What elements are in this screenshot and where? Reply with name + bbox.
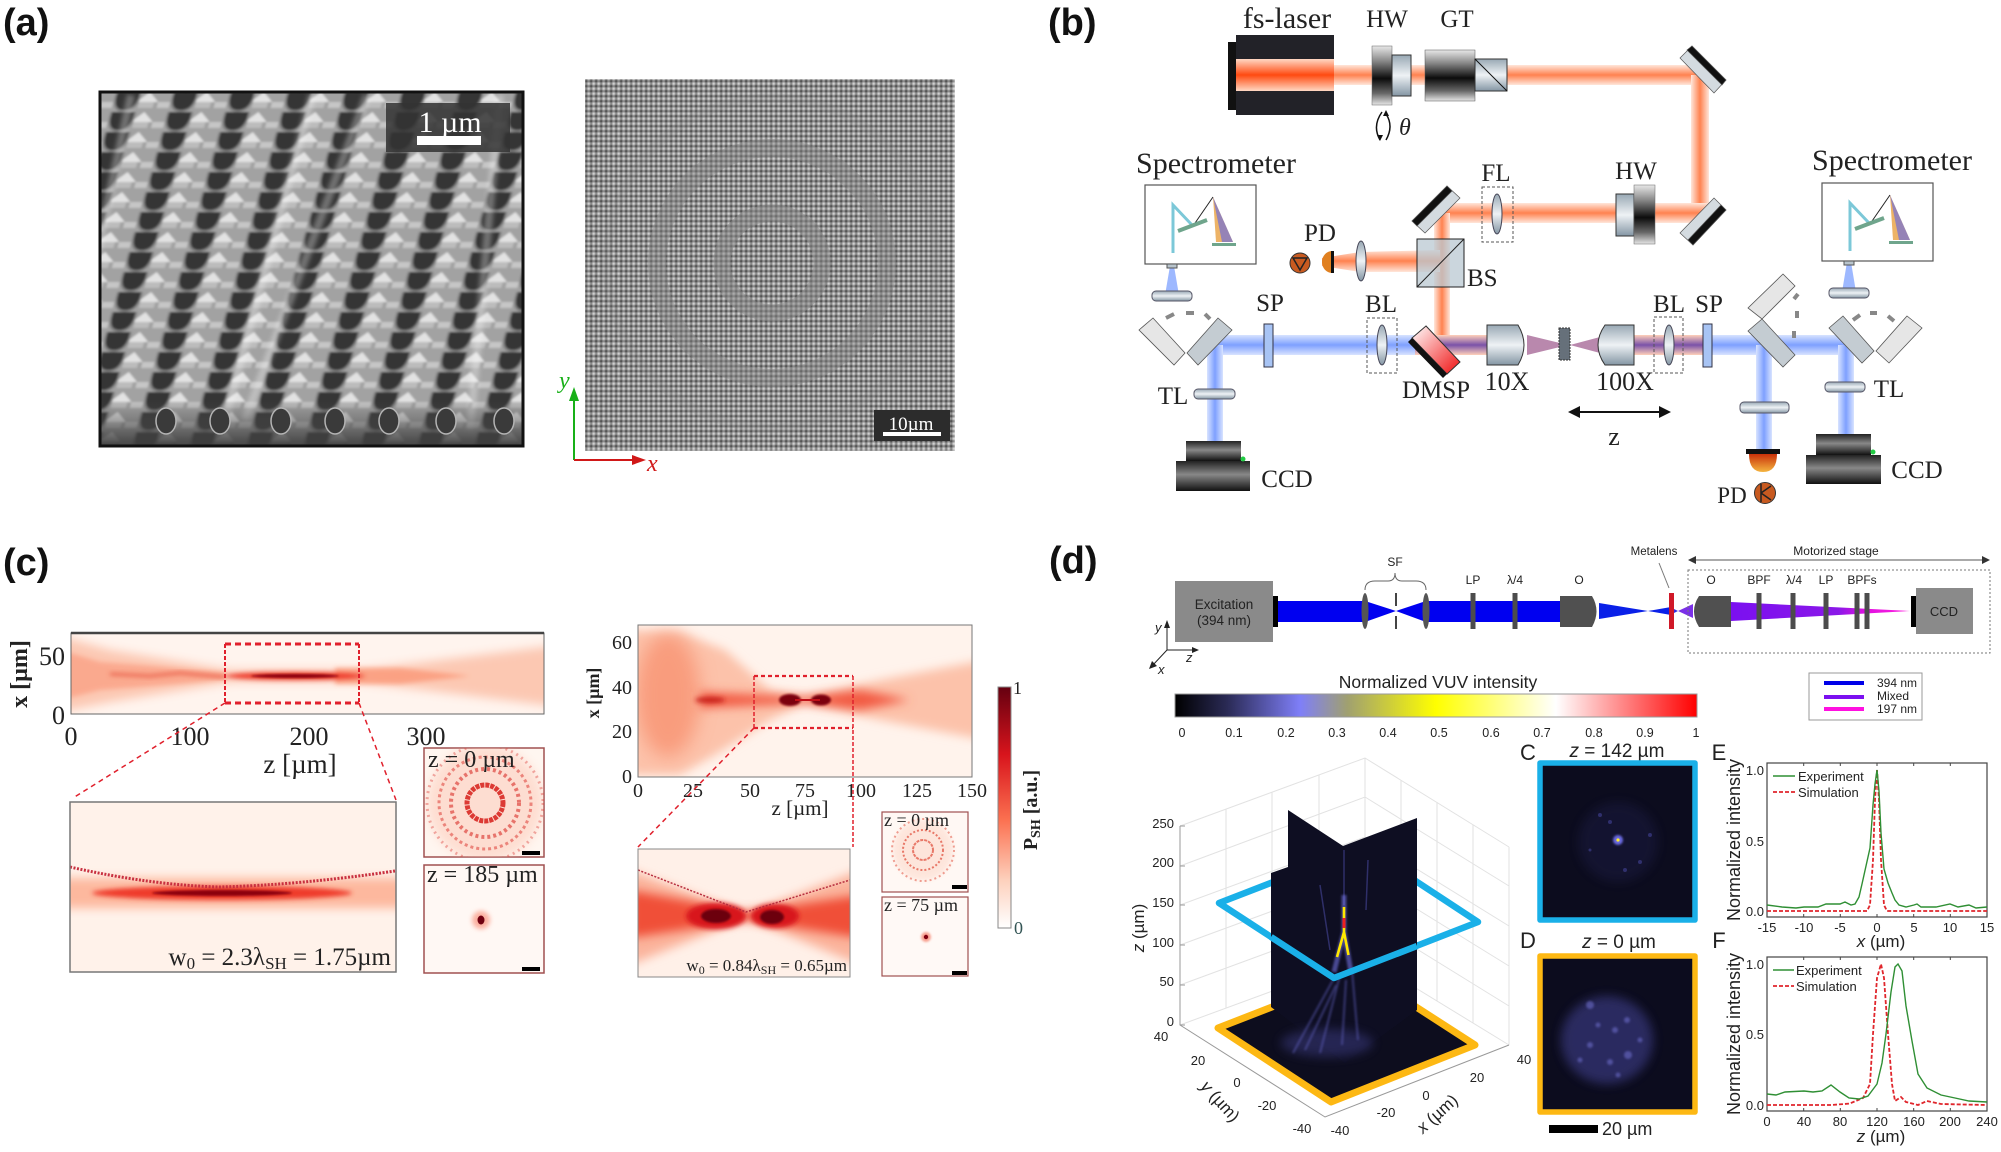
VUV colorbar: Normalized VUV intensity — [1339, 672, 1537, 692]
image D at z=0 — [1520, 928, 1695, 1112]
panel b label: (b) — [1048, 2, 1097, 44]
scale bar 20 µm: 20 µm — [1602, 1119, 1652, 1139]
scale bar 20 µm — [1549, 1119, 1652, 1139]
VUV colorbar: 0.4 — [1379, 726, 1397, 740]
3D plot tick labels: 20 — [1470, 1070, 1484, 1085]
chart F: axial intensity profile — [1712, 928, 1998, 1146]
VUV colorbar: 0.3 — [1328, 726, 1346, 740]
photodiode right: PD — [1717, 483, 1747, 508]
VUV colorbar: 0.2 — [1277, 726, 1295, 740]
panel: a, nanostructure micrographs — [90, 79, 955, 477]
3D plot tick labels: 0 — [1422, 1088, 1430, 1103]
spatial filter SF — [1362, 555, 1430, 629]
scale bar 1 µm: 1 µm — [418, 106, 482, 139]
dichroic mirror DMSP: DMSP — [1402, 377, 1470, 404]
chart E: lateral intensity profile: 0.5 — [1746, 834, 1764, 849]
metalens marker — [1631, 546, 1678, 629]
base plane gold frame — [1218, 972, 1475, 1102]
intensity colorbar: 1 — [1013, 678, 1022, 698]
zoomed heatmap tight focus: SH — [761, 963, 776, 977]
heatmap 1 axes: z [µm] — [263, 749, 337, 779]
heatmap 1 axes: x [µm] — [7, 640, 33, 708]
tube lens labels — [1158, 376, 1904, 410]
3D plot tick labels: 20 — [1191, 1053, 1205, 1068]
panel: b, optical setup schematic — [1136, 2, 1972, 508]
flip mirrors right — [1748, 274, 1922, 367]
3D plot tick labels: -20 — [1377, 1105, 1395, 1120]
3D plot tick labels: 0 — [1167, 1014, 1174, 1029]
optics row labels and filters: λ/4 — [1786, 573, 1802, 587]
image D at z=0: z = 0 µm — [1581, 932, 1656, 953]
VUV colorbar: 0.9 — [1636, 726, 1654, 740]
heatmap 2 axes — [583, 632, 987, 820]
3D plot tick labels: -40 — [1293, 1121, 1311, 1136]
blocking lenses BL — [1365, 291, 1685, 373]
image C at z=142 — [1520, 740, 1695, 920]
CCD camera — [1911, 588, 1973, 634]
3D plot tick labels: 40 — [1517, 1052, 1531, 1067]
spectrometer left — [1136, 147, 1296, 268]
panel: d, VUV metalens experiment — [1129, 544, 1998, 1146]
inset z=0 long focus — [424, 745, 544, 861]
chart E: lateral intensity profile: 15 — [1980, 920, 1994, 935]
3D plot tick labels: z (µm) — [1129, 904, 1148, 953]
VUV colorbar: 0.8 — [1585, 726, 1603, 740]
CCD camera: CCD — [1930, 604, 1958, 619]
excitation source — [1175, 581, 1278, 642]
3D plot tick labels: -40 — [1331, 1123, 1349, 1138]
image C at z=142: C — [1520, 740, 1536, 765]
3D plot tick labels: x (µm) — [1412, 1091, 1462, 1138]
metalens sample — [1559, 328, 1570, 360]
photodiode reference arm: PD — [1304, 220, 1336, 247]
chart E: lateral intensity profile — [1712, 740, 1994, 951]
zoomed heatmap tight focus — [630, 849, 860, 977]
chart E: lateral intensity profile: x (µm) — [1856, 932, 1905, 951]
wavelength legend: 394 nm — [1877, 676, 1917, 690]
zoom box with connector lines, tight focus — [638, 676, 853, 847]
excitation source: (394 nm) — [1197, 613, 1251, 628]
focusing lens FL — [1481, 160, 1513, 242]
heatmap 1 axes: 50 — [39, 642, 65, 671]
VUV colorbar: 0.5 — [1430, 726, 1448, 740]
chart F: axial intensity profile: 0.5 — [1746, 1027, 1764, 1042]
collection lenses — [1152, 288, 1869, 413]
rotation marker theta — [1376, 110, 1411, 141]
photodiode right — [1717, 449, 1780, 508]
blocking lenses BL: BL — [1365, 291, 1397, 318]
chart E: lateral intensity profile: 5 — [1910, 920, 1918, 935]
Glan-Thompson polarizer: GT — [1440, 6, 1474, 33]
panel: c, second-harmonic focusing maps — [7, 625, 1044, 977]
inset z=0 tight focus: z = 0 µm — [884, 810, 949, 830]
half-wave plate 1: HW — [1366, 6, 1408, 33]
chart E: lateral intensity profile: 1.0 — [1746, 763, 1764, 778]
heatmap 2 axes: 20 — [612, 721, 632, 743]
blue beam path — [1164, 262, 1857, 450]
optics row labels and filters: O — [1574, 573, 1584, 587]
3D plot tick labels: 50 — [1160, 974, 1174, 989]
inset z=185 long focus — [424, 862, 544, 973]
3D plot tick labels: 200 — [1152, 855, 1174, 870]
3D plot walls — [1180, 758, 1509, 1045]
heatmap 2 axes: 0 — [633, 780, 643, 802]
wavelength legend: Mixed — [1877, 689, 1909, 703]
3D plot tick labels: 40 — [1154, 1029, 1168, 1044]
xyz axes — [1149, 620, 1199, 677]
optics row labels and filters: BPF — [1747, 573, 1771, 587]
zoomed heatmap long focus: = 1.75µm — [287, 944, 392, 971]
blue focal plane frame back — [1219, 847, 1478, 978]
intensity colorbar — [998, 678, 1044, 938]
heatmap 2 axes: 150 — [957, 780, 987, 802]
zoomed heatmap tight focus: 0 — [699, 963, 705, 977]
inset z=75 tight focus — [882, 895, 968, 976]
optics row labels and filters: LP — [1466, 573, 1480, 587]
heatmap 1 axes: 100 — [170, 722, 210, 751]
objective 10X — [1485, 325, 1530, 396]
panel a label: (a) — [3, 2, 49, 44]
chart F: axial intensity profile: 0 — [1763, 1114, 1771, 1129]
beam splitter BS: BS — [1467, 265, 1498, 292]
chart E: lateral intensity profile: -10 — [1795, 920, 1813, 935]
tube lens labels: TL — [1158, 383, 1188, 410]
heatmap 2 axes: 40 — [612, 677, 632, 699]
optics row labels and filters: BPFs — [1847, 573, 1877, 587]
chart E: lateral intensity profile: Experiment — [1798, 769, 1864, 784]
half-wave plate 2: HW — [1615, 158, 1657, 185]
VUV colorbar: 0.6 — [1482, 726, 1500, 740]
heatmap 2 axes: 50 — [740, 780, 760, 802]
chart E: lateral intensity profile: -5 — [1834, 920, 1846, 935]
optics row labels and filters: LP — [1819, 573, 1833, 587]
heatmap 1 axes: 200 — [290, 722, 328, 751]
3D plot tick labels: 150 — [1152, 895, 1174, 910]
zoomed heatmap long focus: = 2.3λ — [195, 944, 265, 971]
blue focal plane frame front — [1271, 937, 1417, 978]
CCD left: CCD — [1261, 466, 1313, 493]
chart F: axial intensity profile: 240 — [1976, 1114, 1998, 1129]
heatmap 2 axes: 0 — [622, 766, 632, 788]
spectrometer right: Spectrometer — [1812, 144, 1972, 177]
chart E: lateral intensity profile: -15 — [1758, 920, 1776, 935]
heatmap long focus — [60, 633, 560, 714]
heatmap 1 axes — [7, 640, 446, 779]
z translation arrow: z — [1608, 422, 1620, 451]
zoomed heatmap tight focus: = 0.65µm — [776, 956, 847, 975]
CCD left — [1176, 441, 1313, 493]
chart E: lateral intensity profile: 0 — [1873, 920, 1881, 935]
excitation source: Excitation — [1195, 597, 1253, 612]
heatmap 2 axes: 125 — [902, 780, 932, 802]
zoomed heatmap tight focus: = 0.84λ — [705, 956, 762, 975]
optics row labels and filters — [1466, 573, 1877, 629]
objectives — [1560, 596, 1731, 627]
inset z=0 tight focus — [882, 810, 968, 892]
flip mirrors left — [1139, 313, 1232, 365]
Glan-Thompson polarizer — [1425, 6, 1507, 101]
3D plot tick labels — [1129, 816, 1531, 1138]
heatmap 2 axes: z [µm] — [772, 796, 828, 820]
xyz axes: y — [1154, 620, 1163, 635]
chart F: axial intensity profile: 120 — [1866, 1114, 1888, 1129]
image D at z=0: D — [1520, 928, 1536, 953]
image C at z=142: z = 142 µm — [1569, 741, 1664, 762]
VUV colorbar: 0.1 — [1225, 726, 1243, 740]
z translation arrow — [1568, 406, 1671, 451]
half-wave plate 1 — [1366, 6, 1411, 105]
scale bar 1 µm — [386, 103, 510, 152]
orange beam path — [1322, 65, 1709, 345]
chart F: axial intensity profile: 1.0 — [1746, 957, 1764, 972]
panel c label: (c) — [3, 542, 49, 584]
VUV colorbar — [1175, 672, 1700, 740]
heatmap 1 axes: 0 — [64, 722, 78, 751]
zoomed heatmap tight focus: w — [686, 956, 699, 975]
objective 100X — [1596, 325, 1654, 396]
vertical intensity slices — [1271, 810, 1417, 1063]
SEM micrograph — [90, 82, 533, 456]
3D plot tick labels: y (µm) — [1196, 1076, 1243, 1126]
chart E: lateral intensity profile: 10 — [1943, 920, 1957, 935]
laser beam path — [1278, 601, 1910, 622]
focusing lens FL: FL — [1481, 160, 1511, 187]
VUV colorbar: 1 — [1693, 726, 1700, 740]
chart F: axial intensity profile: Experiment — [1796, 963, 1862, 978]
xyz axes: x — [1157, 662, 1165, 677]
motorized stage: Motorized stage — [1793, 544, 1879, 558]
heatmap 2 axes: x [µm] — [583, 668, 603, 718]
photodiode reference arm — [1290, 220, 1366, 281]
intensity colorbar: SH — [1029, 819, 1044, 838]
intensity colorbar: 0 — [1014, 918, 1023, 938]
CCD right — [1806, 434, 1943, 484]
chart F: axial intensity profile: 80 — [1833, 1114, 1847, 1129]
3D plot tick labels: 0 — [1233, 1075, 1241, 1090]
focal beam and wisps — [1281, 850, 1373, 1057]
chart F: axial intensity profile: 160 — [1903, 1114, 1925, 1129]
scale bar 10 µm: 10µm — [889, 414, 934, 435]
metasurface micrograph — [585, 79, 955, 451]
zoomed heatmap long focus: 0 — [187, 954, 195, 973]
inset z=185 long focus: z = 185 µm — [427, 862, 538, 888]
objective 100X: 100X — [1596, 367, 1654, 396]
heatmap 2 axes: 60 — [612, 632, 632, 654]
motorized stage — [1688, 544, 1990, 653]
spectrometer left: Spectrometer — [1136, 147, 1296, 180]
chart F: axial intensity profile: 0.0 — [1746, 1098, 1764, 1113]
spectrometer right — [1812, 144, 1972, 265]
heatmap 2 axes: 100 — [846, 780, 876, 802]
heatmap 1 axes: 300 — [406, 722, 446, 751]
tube lens labels: TL — [1874, 376, 1904, 403]
chart F: axial intensity profile: Normalized intensity — [1724, 953, 1744, 1115]
heatmap 1 axes: 0 — [52, 701, 65, 730]
optics row labels and filters: λ/4 — [1507, 573, 1523, 587]
short pass filters: SP — [1256, 290, 1284, 317]
3D plot tick labels: 250 — [1152, 816, 1174, 831]
short pass filters — [1256, 290, 1723, 367]
chart F: axial intensity profile: z (µm) — [1856, 1127, 1905, 1146]
wavelength legend: 197 nm — [1877, 702, 1917, 716]
zoomed heatmap long focus: w — [169, 944, 187, 971]
wavelength legend — [1809, 673, 1922, 720]
dichroic mirror DMSP — [1402, 326, 1470, 404]
short pass filters: SP — [1695, 291, 1723, 318]
chart E: lateral intensity profile: Normalized intensity — [1724, 759, 1744, 921]
3D focal volume plot — [1129, 758, 1531, 1138]
spatial filter SF: SF — [1387, 555, 1403, 569]
xyz axes: z — [1185, 650, 1193, 665]
optics row labels and filters: O — [1706, 573, 1716, 587]
3D plot tick labels: 100 — [1152, 935, 1174, 950]
half-wave plate 2 — [1615, 158, 1657, 244]
CCD right: CCD — [1891, 457, 1943, 484]
fs-laser: fs-laser — [1243, 2, 1331, 35]
zoom box with connector lines, long focus — [73, 644, 396, 800]
rotation marker theta: θ — [1399, 115, 1411, 141]
mirrors on orange path — [1412, 46, 1726, 245]
VUV colorbar: 0 — [1179, 726, 1186, 740]
chart E: lateral intensity profile: Simulation — [1798, 785, 1859, 800]
chart F: axial intensity profile: F — [1712, 928, 1726, 953]
xy axes: y — [557, 368, 570, 394]
chart F: axial intensity profile: Simulation — [1796, 979, 1857, 994]
zoomed heatmap long focus — [60, 802, 406, 973]
chart F: axial intensity profile: 40 — [1797, 1114, 1811, 1129]
chart E: lateral intensity profile: 0.0 — [1746, 904, 1764, 919]
heatmap 2 axes: 25 — [683, 780, 703, 802]
heatmap 2 axes: 75 — [795, 780, 815, 802]
inset z=0 long focus: z = 0 µm — [428, 747, 515, 773]
panel d label: (d) — [1049, 540, 1098, 582]
intensity colorbar: [a.u.] — [1020, 770, 1042, 819]
chart E: lateral intensity profile: E — [1712, 740, 1726, 765]
xy axes — [557, 368, 658, 477]
fs-laser — [1228, 2, 1334, 115]
heatmap tight focus — [630, 625, 985, 777]
beam splitter BS — [1417, 239, 1498, 292]
3D plot tick labels: -20 — [1258, 1098, 1276, 1113]
scale bar 10 µm — [874, 410, 950, 441]
metalens marker: Metalens — [1631, 546, 1678, 558]
3D plot axes — [1180, 826, 1509, 1117]
objective 10X: 10X — [1485, 367, 1530, 396]
VUV colorbar: 0.7 — [1533, 726, 1551, 740]
intensity colorbar: P — [1020, 838, 1042, 850]
xy axes: x — [646, 451, 658, 477]
inset z=75 tight focus: z = 75 µm — [884, 895, 958, 915]
blocking lenses BL: BL — [1653, 291, 1685, 318]
zoomed heatmap long focus: SH — [265, 954, 287, 973]
chart F: axial intensity profile: 200 — [1939, 1114, 1961, 1129]
